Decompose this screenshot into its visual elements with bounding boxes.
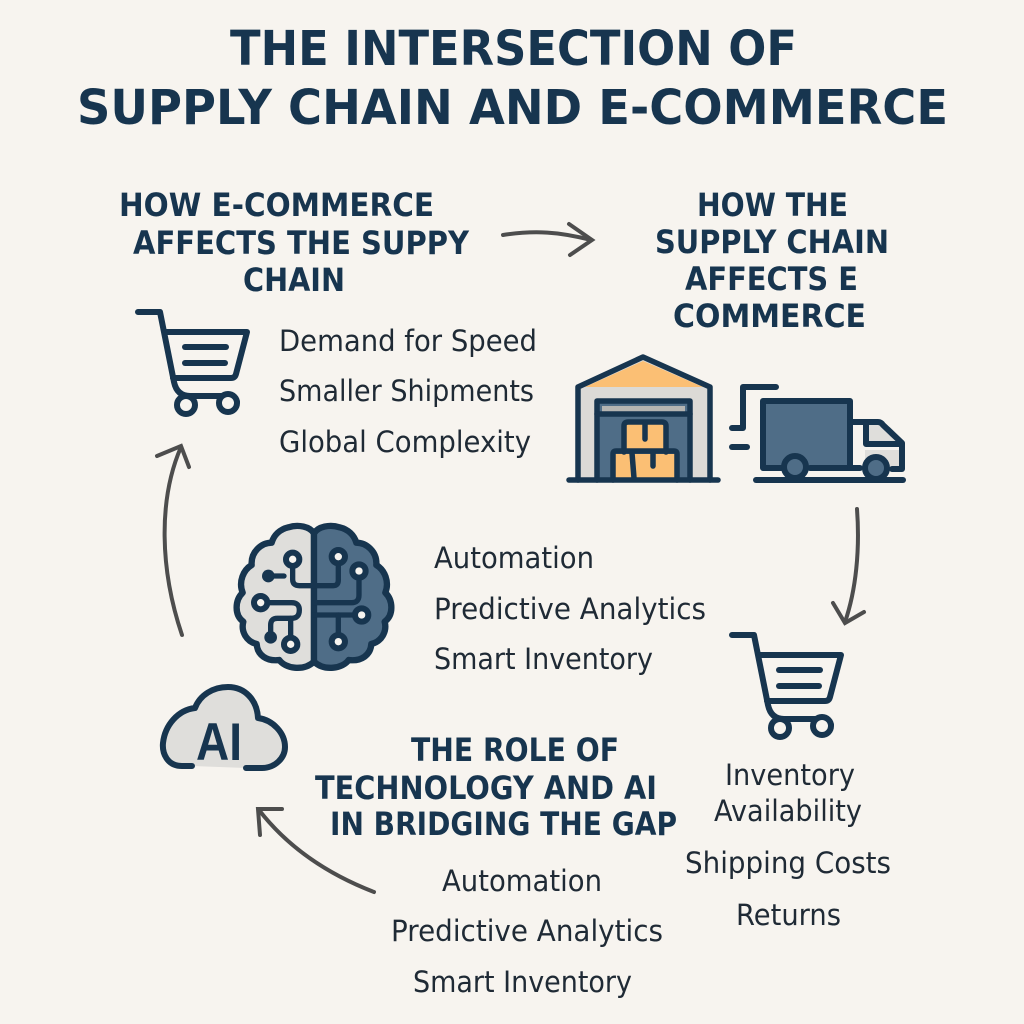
heading: how the supply chain affects e-commerce: COMMERCE	[673, 297, 866, 335]
list: AI benefits: Smart Inventory	[413, 965, 632, 999]
heading: how the supply chain affects e-commerce	[655, 186, 889, 335]
icon: warehouse	[569, 357, 718, 480]
title: THE INTERSECTION OF	[230, 21, 797, 77]
heading: how the supply chain affects e-commerce: SUPPLY CHAIN	[655, 223, 889, 261]
heading: how e-commerce affects the supply chain	[119, 186, 470, 299]
icon: delivery truck	[732, 387, 903, 480]
arrow: top, left to right	[503, 224, 592, 255]
icon: AI cloud	[163, 687, 285, 772]
list: technology benefits: Automation	[434, 541, 594, 575]
heading: role of technology and AI	[315, 731, 677, 843]
list: supply chain effects: Inventory	[725, 758, 855, 792]
icon: shopping cart, lower right	[732, 635, 841, 737]
heading: how e-commerce affects the supply chain: HOW E-COMMERCE	[119, 186, 434, 224]
list: AI benefits: Automation	[442, 864, 602, 898]
list: supply chain effects: Returns	[736, 898, 841, 932]
list: technology benefits: Predictive Analytics	[434, 592, 706, 626]
list: supply chain effects: Availability	[714, 794, 862, 828]
heading: how the supply chain affects e-commerce: HOW THE	[697, 186, 848, 224]
heading: how e-commerce affects the supply chain: AFFECTS THE SUPPY	[133, 224, 470, 262]
icon: circuit brain	[237, 526, 391, 668]
list: e-commerce effects: Global Complexity	[279, 425, 531, 459]
arrow: right side, pointing down	[833, 509, 864, 623]
heading: role of technology and AI: IN BRIDGING THE GAP	[330, 805, 677, 843]
list: supply chain effects: Shipping Costs	[685, 846, 891, 880]
arrow: bottom, pointing to cloud	[258, 809, 374, 892]
list: AI benefits	[391, 864, 663, 999]
title: SUPPLY CHAIN AND E-COMMERCE	[77, 80, 948, 136]
heading: role of technology and AI: THE ROLE OF	[411, 731, 619, 769]
title	[77, 21, 948, 136]
arrow: left side, pointing up	[157, 446, 189, 635]
icon: shopping cart, top left	[138, 312, 247, 414]
list: AI benefits: Predictive Analytics	[391, 914, 663, 948]
icon: AI cloud: AI	[196, 713, 242, 772]
list: technology benefits: Smart Inventory	[434, 642, 653, 676]
list: e-commerce effects: Demand for Speed	[279, 324, 537, 358]
list: technology benefits	[434, 541, 706, 676]
heading: role of technology and AI: TECHNOLOGY AND AI	[315, 769, 657, 807]
heading: how the supply chain affects e-commerce: AFFECTS E	[685, 260, 858, 298]
list: e-commerce effects	[279, 324, 537, 459]
list: supply chain effects	[685, 758, 891, 932]
list: e-commerce effects: Smaller Shipments	[279, 374, 534, 408]
heading: how e-commerce affects the supply chain: CHAIN	[243, 261, 345, 299]
